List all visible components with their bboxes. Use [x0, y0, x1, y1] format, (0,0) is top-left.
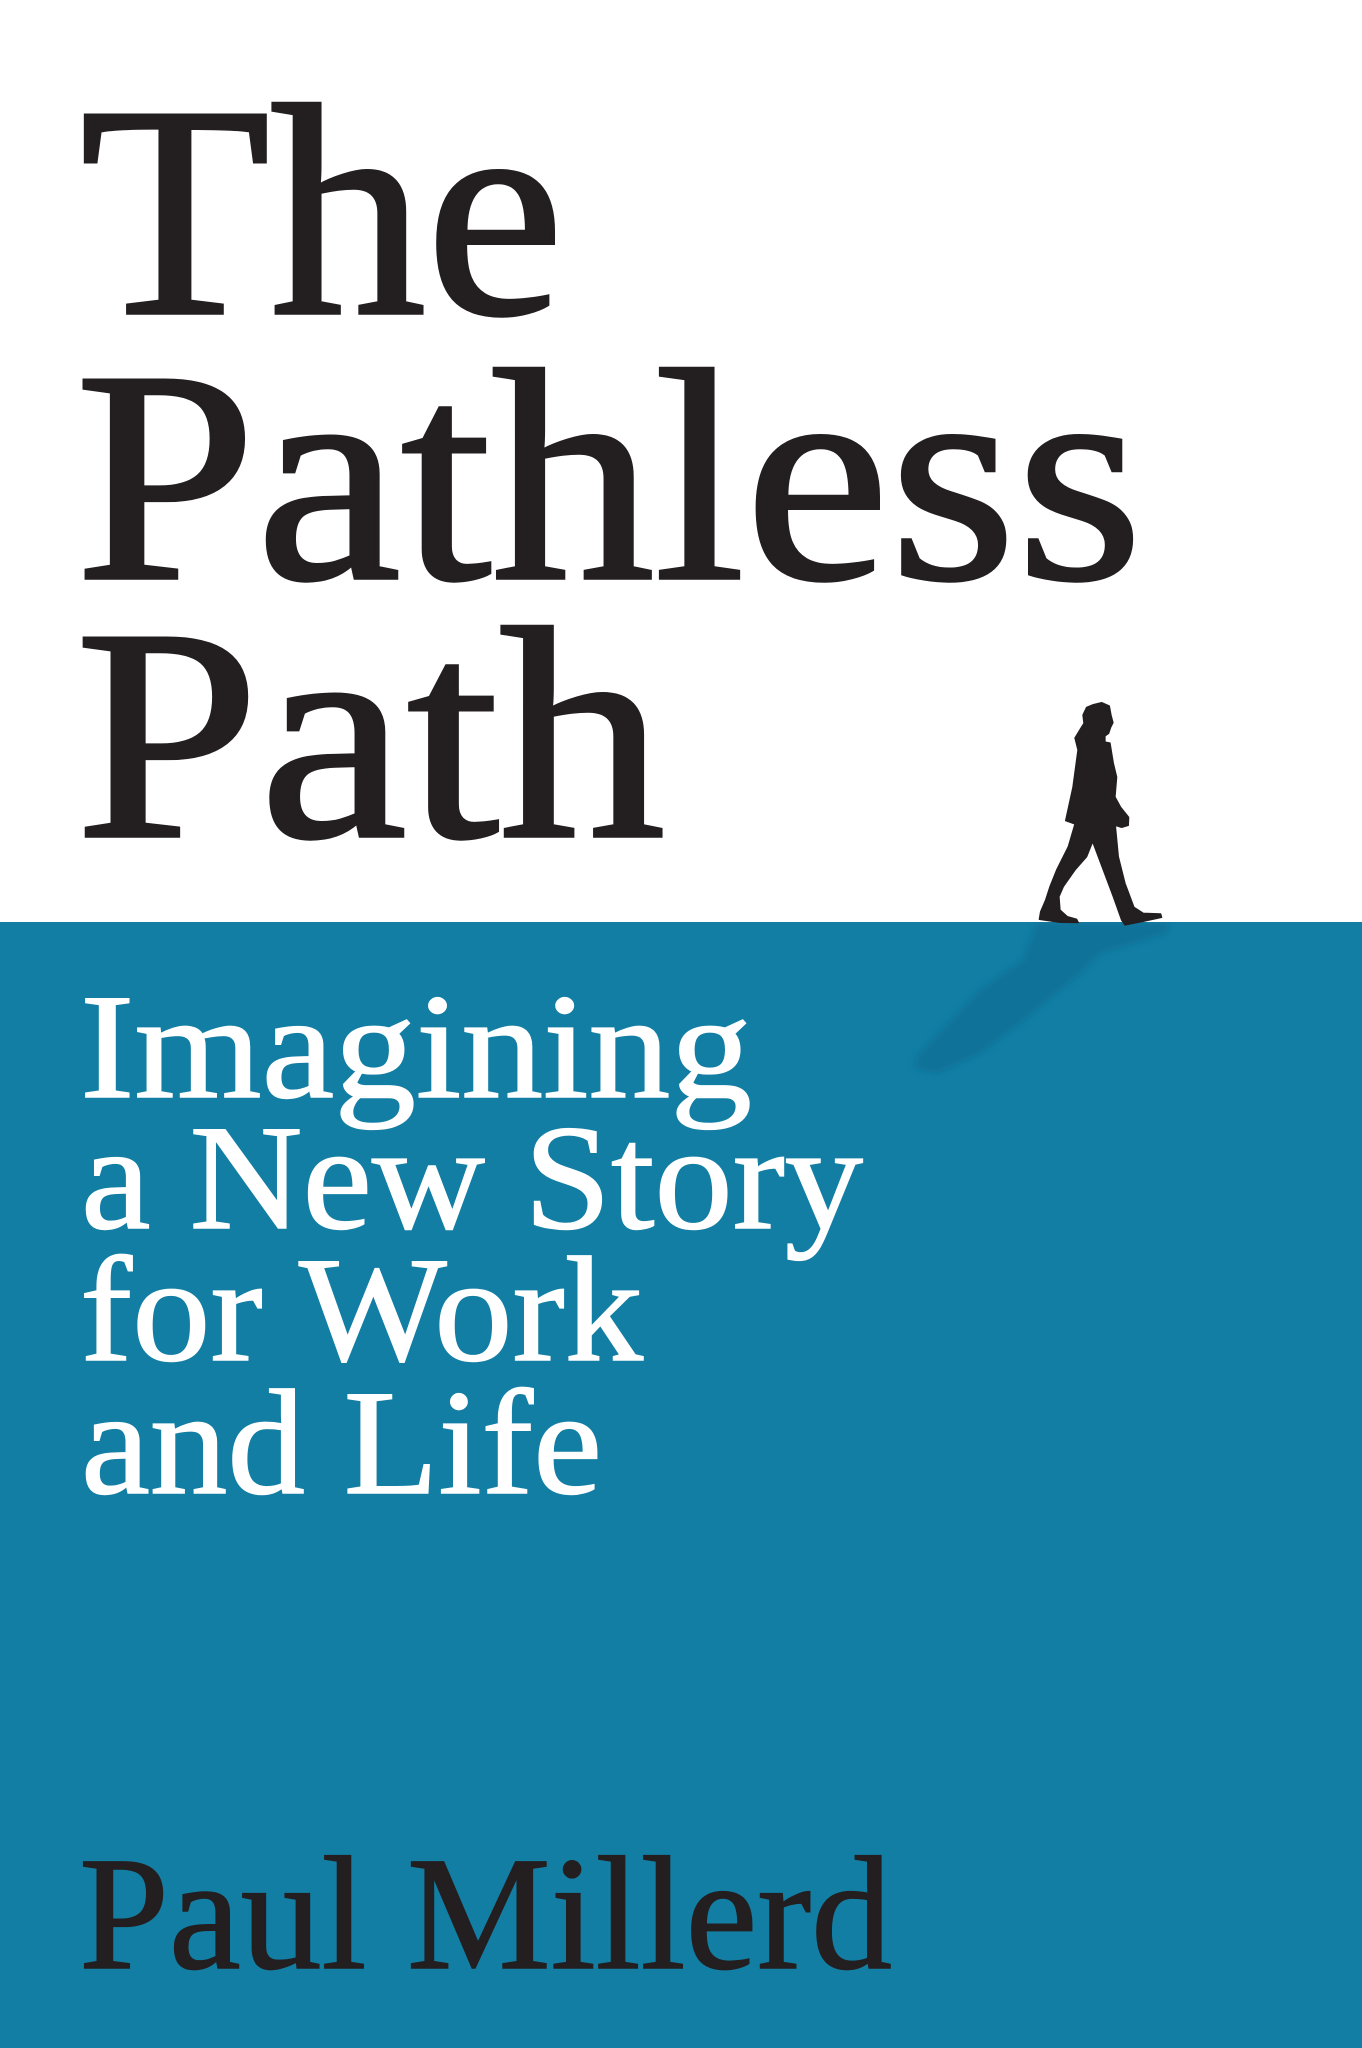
subtitle — [80, 964, 863, 1526]
subtitle: a New Story — [81, 1095, 863, 1261]
panel: white upper background — [0, 0, 1362, 922]
title: Pathless — [75, 310, 1143, 644]
title: The — [80, 45, 564, 379]
subtitle: Imagining — [80, 964, 752, 1130]
author name: Paul Millerd — [79, 1825, 892, 2004]
icon: walking person silhouette — [1039, 703, 1162, 925]
subtitle: and Life — [81, 1360, 602, 1526]
subtitle: for Work — [80, 1227, 643, 1393]
title: Path — [75, 568, 665, 902]
walker shadow — [915, 922, 1170, 1073]
title — [75, 45, 1143, 902]
panel: blue lower background — [0, 922, 1362, 2048]
